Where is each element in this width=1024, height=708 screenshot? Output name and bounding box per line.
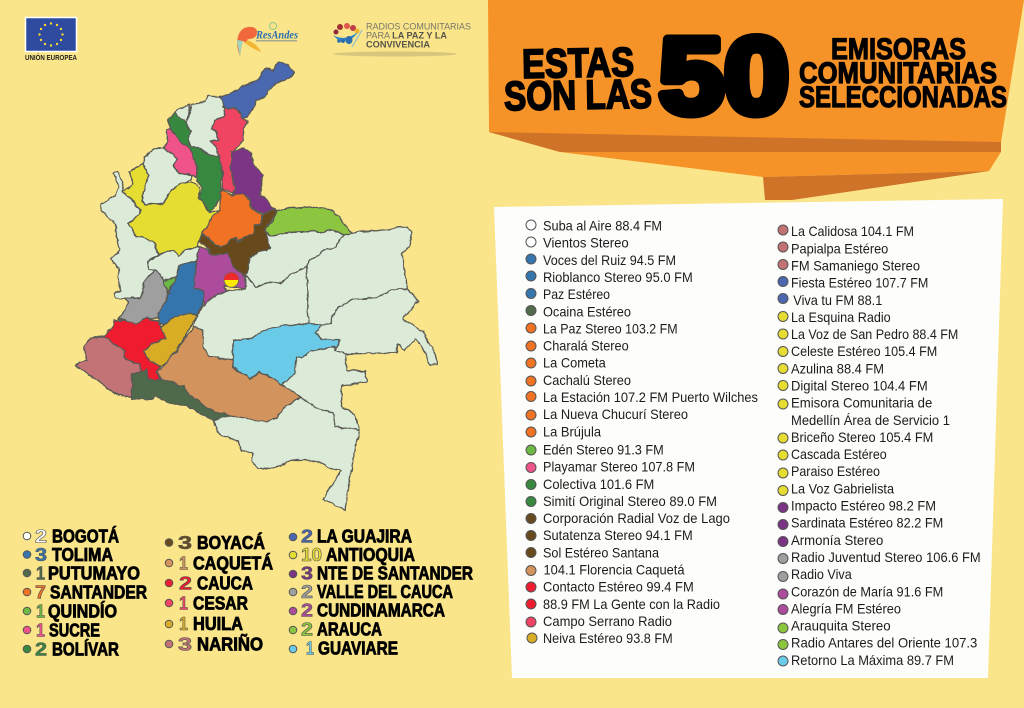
station list: left column: La Nueva Chucurí Stereo <box>543 406 688 422</box>
station list: left column: La Cometa <box>543 355 606 371</box>
logo: ResAndes: ResAndes <box>255 28 298 42</box>
legend column three: 2 <box>301 620 313 640</box>
legend column one: 2 <box>35 526 47 546</box>
legend column two: 1 <box>179 614 188 634</box>
station list: right column: Corazón de María 91.6 FM <box>791 583 943 599</box>
Nariño <box>75 336 140 397</box>
station list: left column: Vientos Stereo <box>543 235 629 251</box>
title text: COMUNITARIAS <box>799 57 997 90</box>
legend column one: 2 <box>35 640 47 660</box>
station list: left column: Voces del Ruiz 94.5 FM <box>543 252 676 268</box>
legend column one: 7 <box>35 582 46 602</box>
logo: Radios Comunitarias: RADIOS COMUNITARIAS <box>366 22 471 32</box>
legend column two: CAQUETÁ <box>193 552 273 574</box>
Caquetá <box>157 327 302 422</box>
eastern departments base <box>193 227 437 510</box>
legend column one: TOLIMA <box>52 545 113 565</box>
station list: left column: Simití Original Stereo 89.0 FM <box>543 493 717 509</box>
station list: left column: Sol Estéreo Santana <box>543 544 659 560</box>
station list: right column: La Esquina Radio <box>791 309 891 325</box>
legend column one: PUTUMAYO <box>48 564 140 584</box>
legend column three: VALLE DEL CAUCA <box>317 582 453 602</box>
Arauca <box>266 207 353 236</box>
Bolívar <box>168 112 223 213</box>
station list: right column: Cascada Estéreo <box>791 446 887 462</box>
station list: right column: FM Samaniego Stereo <box>791 258 920 274</box>
station list: right column: Retorno La Máxima 89.7 FM <box>791 652 954 668</box>
legend column two: 1 <box>179 594 188 614</box>
station list: left column: Rioblanco Stereo 95.0 FM <box>543 269 693 285</box>
station list: right column: Arauquita Stereo <box>791 618 891 634</box>
station list: left column: Playamar Stereo 107.8 FM <box>543 459 695 475</box>
station list: right column: La Voz Gabrielista <box>791 480 894 496</box>
station list: left column: Ocaina Estéreo <box>543 303 631 319</box>
white station list panel <box>494 199 1003 678</box>
legend column one: BOLÍVAR <box>52 638 119 660</box>
legend column two: NARIÑO <box>197 634 263 654</box>
Quindío <box>163 277 177 293</box>
station list: right column: Viva tu FM 88.1 <box>793 292 882 308</box>
station list: right column: Armonía Stereo <box>791 532 883 548</box>
station list: left column: Corporación Radial Voz de Lago <box>543 510 730 526</box>
title text: SON LAS <box>504 71 652 119</box>
Córdoba <box>142 148 192 205</box>
legend column one: 1 <box>36 620 45 640</box>
legend column one: 1 <box>36 602 45 622</box>
Boyacá <box>199 210 277 277</box>
logo: Unión Europea <box>25 18 77 62</box>
title text: ESTAS <box>522 39 634 87</box>
legend column two: HUILA <box>193 614 243 634</box>
legend: departments <box>23 526 473 660</box>
legend column three: CUNDINAMARCA <box>317 600 445 620</box>
station list: right column: Alegría FM Estéreo <box>791 600 901 616</box>
station list: left column: 104.1 Florencia Caquetá <box>544 562 685 578</box>
Chocó <box>101 172 158 298</box>
Santander <box>202 191 262 247</box>
logo: Radios Comunitarias: CONVIVENCIA <box>366 40 431 50</box>
station list: right column: Sardinata Estéreo 82.2 FM <box>791 515 943 531</box>
Guaviare <box>233 323 340 385</box>
legend column one: 3 <box>35 545 47 565</box>
legend column two: 1 <box>179 554 188 574</box>
legend column two: 3 <box>178 634 192 654</box>
station list: right column: Digital Stereo 104.4 FM <box>791 378 928 394</box>
station list: right column: Radio Viva <box>791 566 852 582</box>
legend column three: NTE DE SANTANDER <box>317 564 473 584</box>
legend column three: 2 <box>301 526 313 546</box>
legend column three <box>289 526 473 658</box>
station list: right column: Celeste Estéreo 105.4 FM <box>791 343 937 359</box>
station list: left column: La Paz Stereo 103.2 FM <box>543 320 678 336</box>
legend column two: BOYACÁ <box>197 532 265 553</box>
Cesar <box>211 107 247 192</box>
legend column two: CESAR <box>193 594 248 614</box>
legend column one: QUINDÍO <box>48 600 117 622</box>
station list: right column: La Calidosa 104.1 FM <box>791 223 914 239</box>
station list: right column: Radio Juventud Stereo 106.6 FM <box>791 549 981 565</box>
station list: right column: Briceño Stereo 105.4 FM <box>791 429 933 445</box>
station list: right column: Azulina 88.4 FM <box>791 360 884 376</box>
station list: left column: Colectiva 101.6 FM <box>543 476 654 492</box>
station list: left column: Cachalú Stereo <box>543 372 631 388</box>
station list: right column: La Voz de San Pedro 88.4 FM <box>791 326 958 342</box>
station list: left column: La Estación 107.2 FM Puerto Wilches <box>543 389 758 405</box>
orange title banner <box>488 0 1024 200</box>
internal boundaries east <box>246 235 407 430</box>
Sucre <box>164 128 198 177</box>
La Guajira <box>220 62 295 117</box>
logo: Unión Europea: UNIÓN EUROPEA <box>25 53 77 62</box>
Bogotá marker <box>224 273 239 287</box>
station list: right column: Emisora Comunitaria de <box>791 395 933 411</box>
station list: left column: 88.9 FM La Gente con la Radio <box>543 596 720 612</box>
Cundinamarca <box>194 247 246 306</box>
title text: 50 <box>659 15 789 136</box>
station list: left column: Campo Serrano Radio <box>543 613 672 629</box>
legend column three: GUAVIARE <box>318 638 398 658</box>
legend column one: SANTANDER <box>50 582 147 602</box>
legend column one: 1 <box>36 564 45 584</box>
legend column two: 2 <box>179 574 192 594</box>
legend column three: ANTIOQUIA <box>326 545 415 565</box>
Tolima <box>158 261 204 325</box>
station list: left column: Charalá Stereo <box>543 338 629 354</box>
Caldas and Risaralda <box>148 247 198 280</box>
legend column one: BOGOTÁ <box>52 526 119 546</box>
logo: Radios Comunitarias: PARA LA PAZ Y LA <box>366 30 448 40</box>
station list: left column <box>526 218 758 646</box>
Putumayo <box>132 369 230 420</box>
legend column three: 3 <box>301 564 313 584</box>
legend column three: 2 <box>301 582 313 602</box>
Huila <box>144 303 205 366</box>
station list: right column: Medellín Área de Servicio 1 <box>791 412 950 428</box>
station list: left column: Suba al Aire 88.4 FM <box>543 218 662 234</box>
Antioquia <box>123 164 219 257</box>
Atlántico <box>176 104 190 123</box>
legend column two: 3 <box>178 533 192 553</box>
station list: left column: Edén Stereo 91.3 FM <box>543 442 664 458</box>
title text <box>504 15 1007 136</box>
legend column two <box>165 532 273 654</box>
legend column one <box>23 526 147 660</box>
station list: right column <box>778 223 981 668</box>
legend column one: SUCRE <box>49 620 100 640</box>
Norte de Santander <box>229 148 274 214</box>
station list: left column: Sutatenza Stereo 94.1 FM <box>543 527 693 543</box>
map regions <box>75 62 437 510</box>
legend column three: 10 <box>301 545 322 565</box>
station list: right column: Impacto Estéreo 98.2 FM <box>791 498 936 514</box>
station list: right column: Papialpa Estéreo <box>791 240 888 256</box>
logo: ResAndes <box>237 22 298 56</box>
station list: left column: La Brújula <box>543 423 601 439</box>
legend column three: 2 <box>301 600 313 620</box>
legend column three: 1 <box>306 638 314 658</box>
Magdalena <box>187 95 225 157</box>
station list: right column: Radio Antares del Oriente 107.3 <box>791 635 977 651</box>
logo: Radios Comunitarias <box>333 22 471 56</box>
station list: left column: Neiva Estéreo 93.8 FM <box>543 630 673 646</box>
station list: right column: Paraiso Estéreo <box>791 463 880 479</box>
legend column three: ARAUCA <box>317 620 382 640</box>
Valle del Cauca <box>118 270 168 324</box>
Cauca <box>103 317 166 379</box>
station list: right column: Fiesta Estéreo 107.7 FM <box>791 275 928 291</box>
map of Colombia <box>75 62 437 510</box>
title text: EMISORAS <box>831 33 966 66</box>
legend column two: CAUCA <box>197 574 253 594</box>
legend column three: LA GUAJIRA <box>317 526 412 546</box>
station list: left column: Contacto Estéreo 99.4 FM <box>543 579 694 595</box>
station list: left column: Paz Estéreo <box>543 286 610 302</box>
